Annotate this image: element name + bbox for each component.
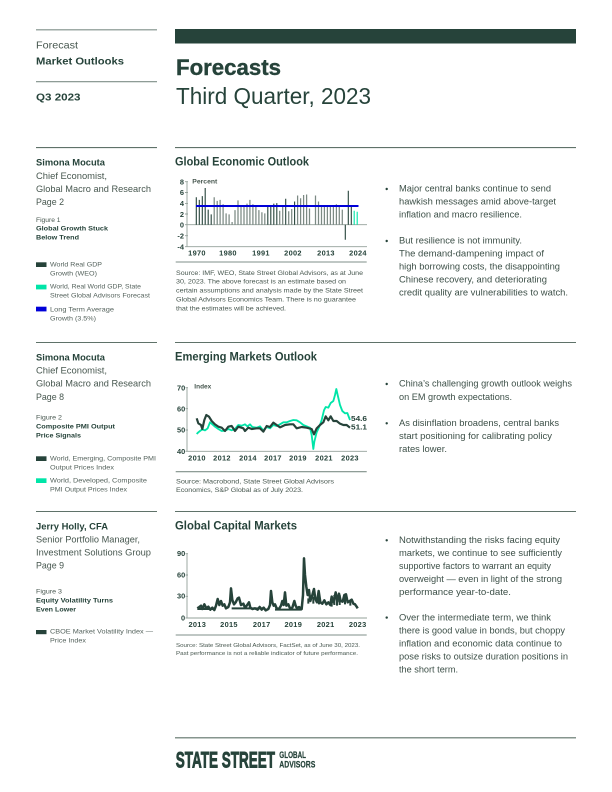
legend: figure 1: Growth (3.5%) [50,316,96,323]
sidebar: section 2 author and figure: Simona Mocuta [36,353,106,363]
bullets: global economic outlook: high borrowing costs, the disappointing [399,262,560,272]
bar chart: global growth: -4 [177,242,185,251]
line chart: composite PMI: 2023 [341,454,359,462]
bar chart: global growth: 4 [180,199,185,208]
bar chart: global growth: 1980 [219,248,237,258]
line chart: composite PMI: Index [194,383,212,390]
line chart: equity volatility: 30 [177,592,185,601]
bullets: global capital markets: there is good value in bonds, but choppy [399,625,566,635]
source note: figure 2: Economics, S&P Global as of July 2023. [176,487,303,494]
bar chart: global growth: 0 [180,220,184,229]
sidebar: section 2 author and figure: Page 8 [36,392,64,403]
sidebar: section 3 author and figure: Jerry Holly, CFA [36,521,108,531]
legend: figure 2: Output Prices Index [50,465,115,472]
line chart: composite PMI: 60 [177,404,185,413]
bullets: global economic outlook [386,184,568,298]
bar chart: global growth: 8 [180,177,184,186]
heading: global capital markets: Global Capital Markets [175,520,297,532]
sidebar: section 1 author and figure: Below Trend [36,235,79,242]
bullets: global economic outlook: credit quality are vulnerabilities to watch. [399,288,568,298]
source note: figure 3: Source: State Street Global Advisors, FactSet, as of June 30, 2023. [176,643,360,649]
sidebar: section 2 author and figure: Figure 2 [36,415,62,422]
bullets: global capital markets: pose risks to outsize duration positions in [399,651,568,661]
bullets: global capital markets: Over the intermediate term, we think [399,612,552,622]
bar chart: global growth: 1970 [188,248,206,258]
sidebar: section 3 author and figure [36,521,151,613]
sidebar: section 2 author and figure [36,353,151,440]
sidebar: section 3 author and figure: Figure 3 [36,588,62,595]
line chart: composite PMI: 2014 [239,454,257,462]
line chart: equity volatility: 2019 [284,620,302,629]
bar chart: global growth: 2024 [349,248,367,258]
bullets: global capital markets: overweight — even in light of the strong [399,574,562,584]
logo: State Street Global Advisors: STATE STREET [176,747,275,772]
legend: figure 2: World, Developed, Composite [50,478,147,485]
bullets: global capital markets: performance year-to-date. [399,587,511,597]
heading: emerging markets outlook: Emerging Markets Outlook [175,352,318,364]
bar chart: global growth: 2013 [317,248,335,258]
sidebar: section 2 author and figure: Price Signals [36,433,81,440]
source note: figure 1: certain assumptions and analysis made by the State Street [176,287,363,294]
source note: figure 1: 30, 2023. The above forecast is an estimate based on [176,279,347,286]
source note: figure 2: Source: Macrobond, State Street Global Advisors [176,478,334,485]
source note: figure 2 [176,472,367,494]
sidebar: section 1 author and figure: Figure 1 [36,217,61,224]
legend: figure 1: World, Real World GDP, State [50,284,141,291]
bar chart: global growth: 6 [180,188,184,197]
sidebar: section 3 author and figure: Investment Solutions Group [36,547,151,558]
sidebar: section 3 author and figure: Page 9 [36,560,64,571]
bullets: global capital markets [386,535,568,674]
sidebar header: Market Outlooks [36,56,124,68]
sidebar: section 3 author and figure: Equity Volatility Turns [36,597,113,604]
source note: figure 1: that the estimates will be achieved. [176,305,286,312]
line chart: composite PMI: 2012 [213,454,231,462]
line chart: composite PMI: 51.1 [351,422,367,431]
line chart: composite PMI: 2021 [315,454,333,462]
header bar [175,29,576,44]
bullets: global economic outlook: Chinese recovery, and deteriorating [399,275,547,285]
bullets: emerging markets outlook: As disinflation broadens, central banks [399,418,560,428]
line chart: equity volatility [177,549,367,629]
logo: State Street Global Advisors: ADVISORS [279,759,315,769]
sidebar: section 2 author and figure: Global Macro and Research [36,379,151,390]
sidebar: section 1 author and figure: Chief Economist, [36,171,107,182]
source note: figure 1: Global Advisors Economics Team. There is no guarantee [176,296,357,303]
bar chart: global growth: 2002 [284,248,302,258]
bullets: global capital markets: the short term. [399,664,458,674]
bar chart: global growth: Percent [192,179,218,186]
bar chart: global growth [177,177,367,258]
legend: figure 1 [36,262,150,323]
sidebar: section 1 author and figure: Global Growth Stuck [36,226,108,233]
bullets: global capital markets: Notwithstanding the risks facing equity [399,535,561,545]
bullets: global economic outlook: inflation and macro resilience. [399,210,522,220]
legend: figure 3: Price Index [50,637,87,644]
bullets: global economic outlook: Major central banks continue to send [399,184,551,194]
bullets: global capital markets: supportive factors to warrant an equity [399,561,551,571]
sidebar: section 2 author and figure: Chief Economist, [36,366,107,377]
line chart: composite PMI: 70 [177,383,185,392]
sidebar header: Q3 2023 [36,92,81,104]
line chart: composite PMI: 2017 [264,454,282,462]
legend: figure 2 [36,456,156,494]
bullets: emerging markets outlook: start positioning for calibrating policy [399,431,553,441]
sidebar: section 1 author and figure [36,158,151,242]
line chart: equity volatility: 2023 [349,620,367,629]
bar chart: global growth: -2 [177,231,184,240]
bar chart: global growth: 2 [180,210,184,219]
line chart: composite PMI: 50 [177,426,185,435]
line chart: equity volatility: 60 [177,570,185,579]
bullets: global economic outlook: The demand-dampening impact of [399,249,545,259]
line chart: equity volatility: 2021 [317,620,335,629]
bullets: global economic outlook: But resilience is not immunity. [399,236,522,246]
line chart: composite PMI: 40 [177,447,185,456]
sidebar header: Forecast [36,40,78,52]
line chart: equity volatility: 2015 [220,620,238,629]
line chart: composite PMI: 2019 [289,454,307,462]
sidebar: section 3 author and figure: Even Lower [36,606,76,613]
bullets: global capital markets: markets, we continue to see sufficiently [399,548,563,558]
line chart: equity volatility: 90 [177,549,185,558]
bullets: global capital markets: inflation and economic data continue to [399,638,562,648]
bullets: emerging markets outlook [386,379,572,454]
title [176,55,371,109]
legend: figure 3 [36,628,153,644]
line chart: equity volatility: 0 [181,614,185,622]
legend: figure 1: Street Global Advisors Forecast [50,293,150,300]
source note: figure 1 [176,262,367,312]
legend: figure 1: Long Term Average [50,307,114,314]
logo: State Street Global Advisors: GLOBAL [279,750,306,760]
source note: figure 3: Past performance is not a reliable indicator of future performance. [176,651,358,657]
sidebar: section 3 author and figure: Senior Portfolio Manager, [36,534,140,545]
legend: figure 2: World, Emerging, Composite PMI [50,456,156,463]
sidebar: section 2 author and figure: Composite PMI Output [36,424,116,431]
title: Third Quarter, 2023 [176,83,371,109]
source note: figure 1: Source: IMF, WEO, State Street Global Advisors, as at June [176,270,364,277]
line chart: composite PMI: 2010 [188,454,206,462]
line chart: equity volatility: 2017 [253,620,271,629]
legend: figure 1: Growth (WEO) [50,271,97,278]
line chart: composite PMI [177,383,367,462]
legend: figure 1: World Real GDP [50,262,103,269]
sidebar: section 1 author and figure: Page 2 [36,197,64,208]
bullets: global economic outlook: hawkish messages amid above-target [399,197,557,207]
source note: figure 3 [176,635,367,657]
sidebar: section 1 author and figure: Global Macro and Research [36,184,151,195]
bullets: emerging markets outlook: China’s challenging growth outlook weighs [399,379,572,389]
sidebar: section 1 author and figure: Simona Mocuta [36,158,106,168]
sidebar header [36,40,124,104]
legend: figure 2: PMI Output Prices Index [50,487,128,494]
legend: figure 3: CBOE Market Volatility Index — [50,628,153,635]
title: Forecasts [176,55,281,80]
line chart: composite PMI: 54.6 [351,414,367,423]
bullets: emerging markets outlook: on EM growth expectations. [399,392,512,402]
bar chart: global growth: 1991 [252,248,270,258]
bullets: emerging markets outlook: rates lower. [399,444,447,454]
line chart: equity volatility: 2013 [188,620,206,629]
heading: global economic outlook: Global Economic Outlook [175,157,310,169]
